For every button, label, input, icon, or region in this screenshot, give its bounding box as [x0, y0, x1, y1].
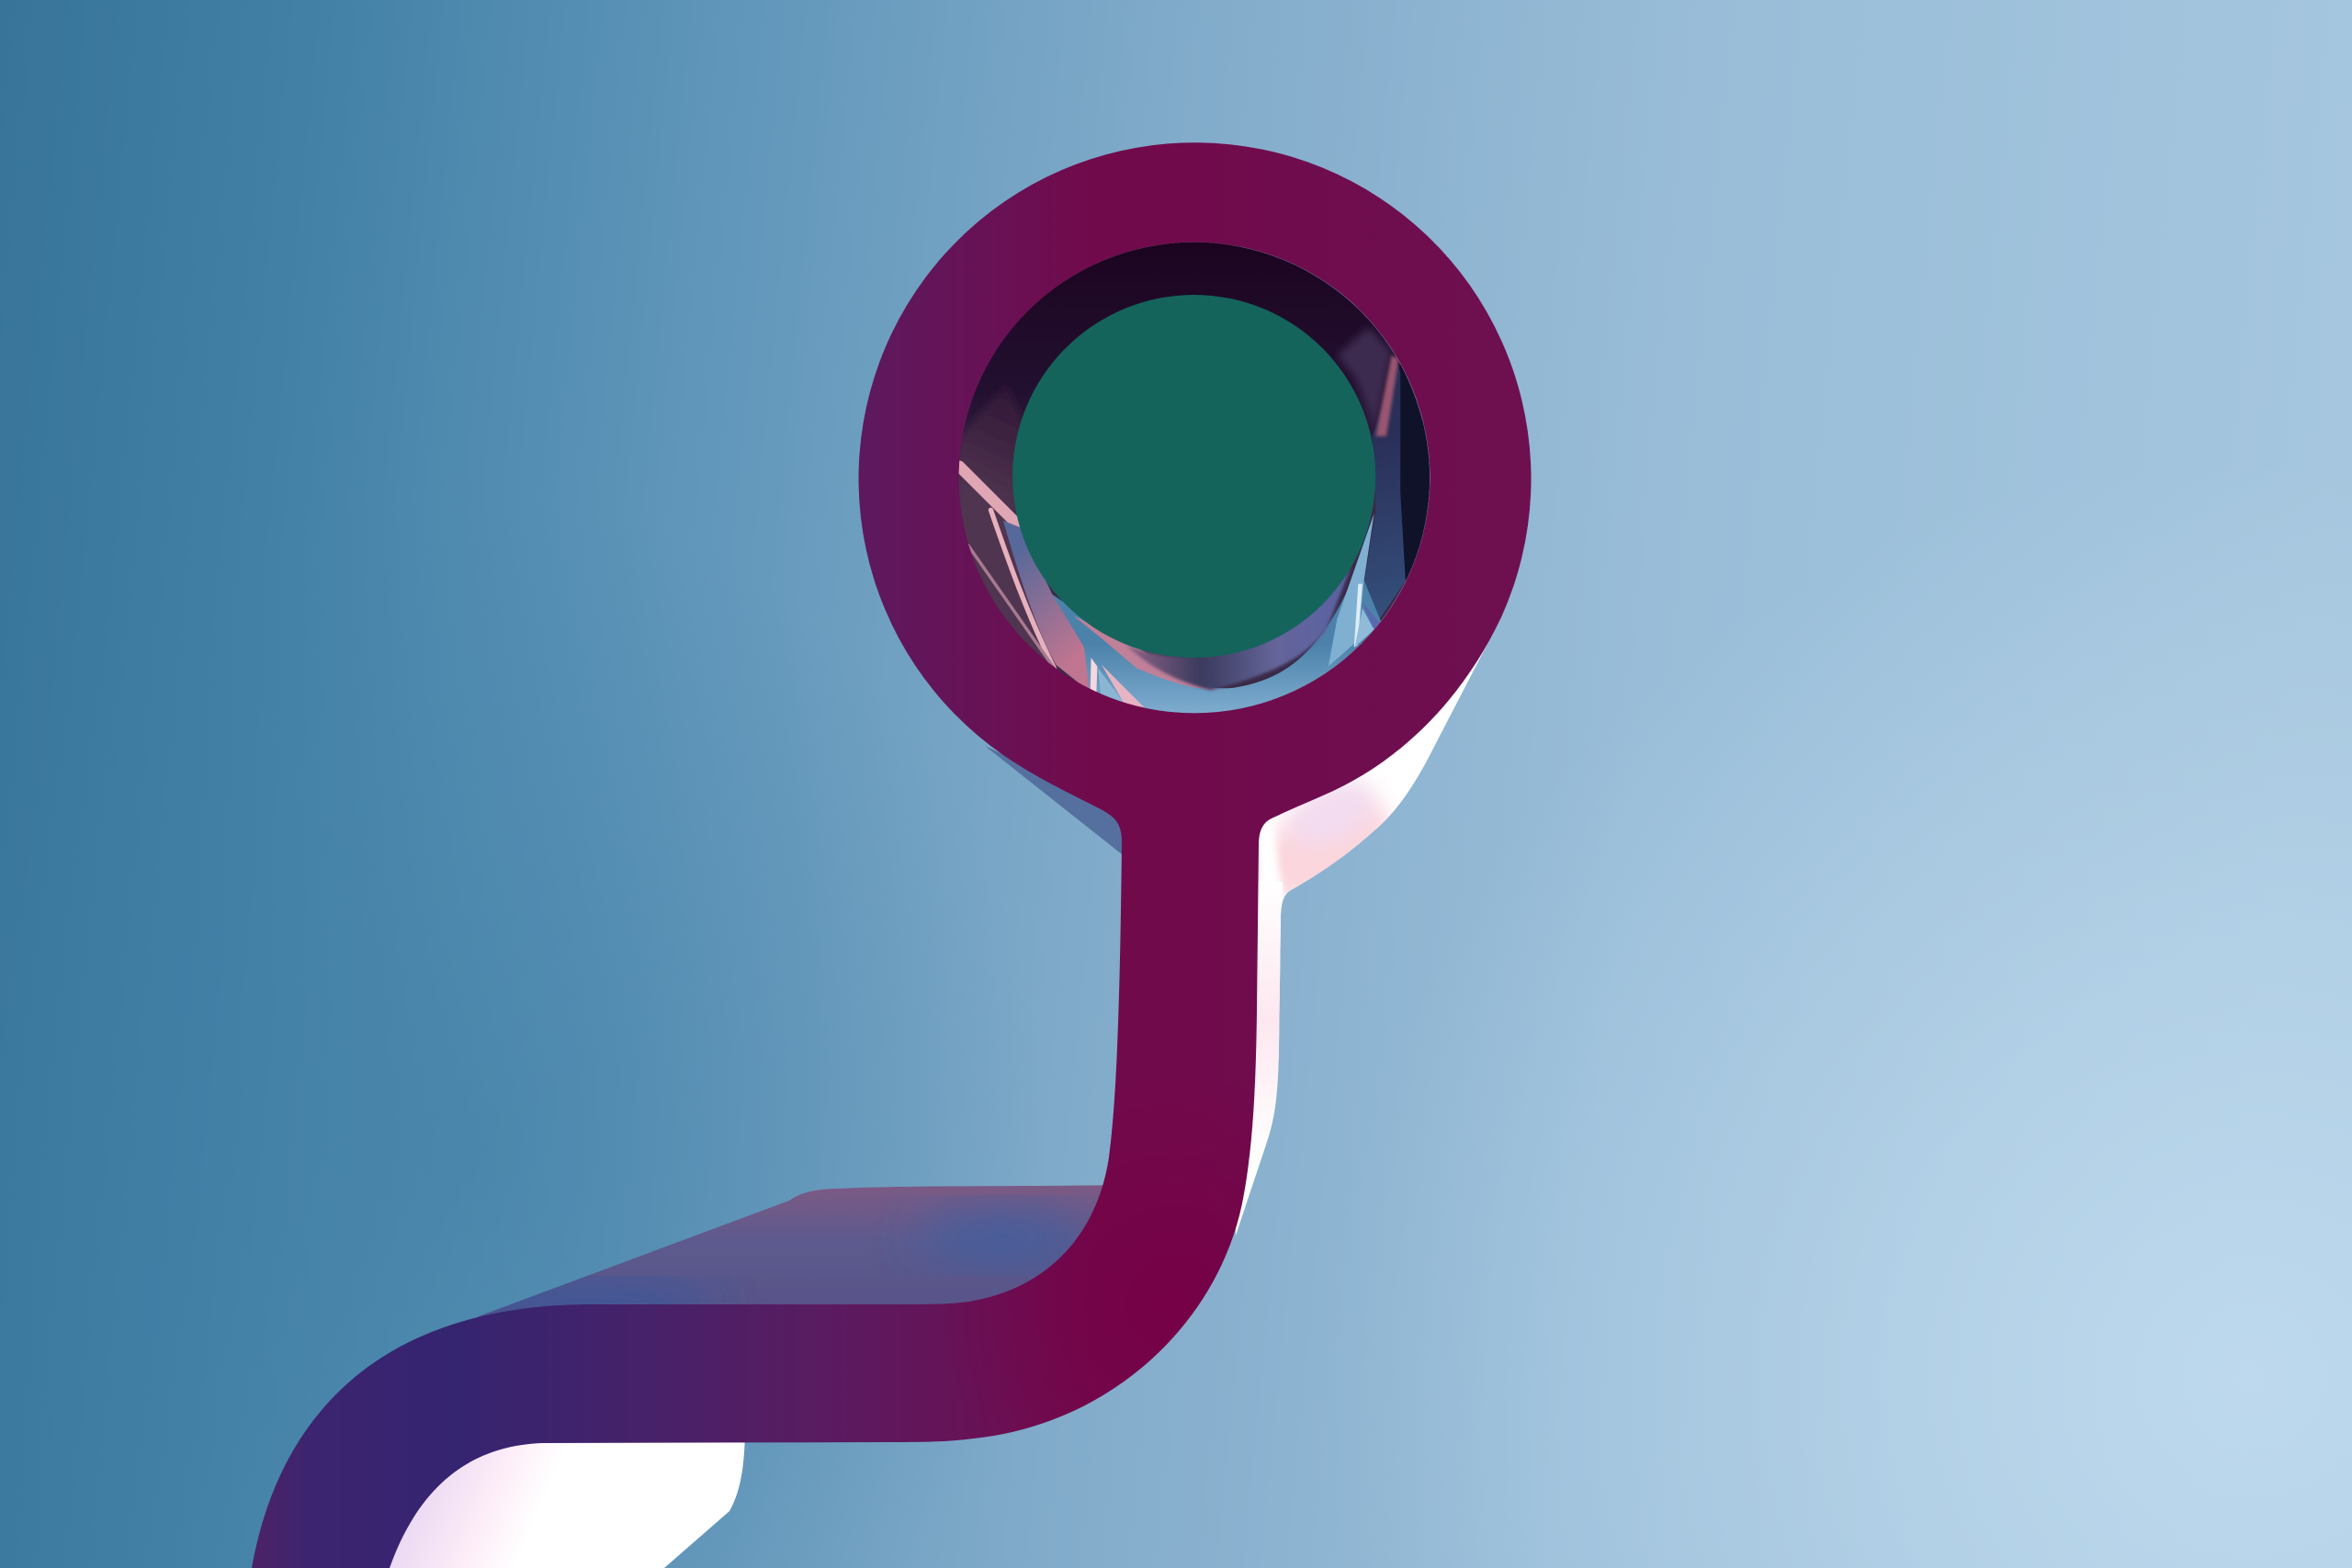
interior: right periwinkle corner [1362, 602, 1379, 629]
white inner face below lower ribbon [368, 1433, 745, 1568]
interior: right dark edge [1400, 364, 1430, 582]
shadowed wing left of stem [985, 746, 1122, 854]
hollow interior of ring [954, 236, 1436, 728]
interior: mauve blue fold [1003, 521, 1091, 693]
interior: pink band under disc [1073, 615, 1217, 690]
interior: right pale blue column [1329, 513, 1374, 667]
interior: pink lower glint [1102, 665, 1145, 707]
interior: right thin glint [1354, 584, 1363, 648]
interior: white vertical glint [1091, 658, 1097, 696]
green disc [1012, 295, 1375, 658]
interior: dark belly under disc [1126, 566, 1351, 690]
interior: light blue floor [1053, 581, 1381, 713]
interior: left mauve reflection [959, 388, 1057, 668]
back face of lower ribbon [479, 1185, 1102, 1317]
interior: pale blue wedge [1098, 669, 1123, 702]
interior: right navy panel [1364, 364, 1430, 619]
interior: right pink streak [1375, 355, 1398, 436]
interior: upper right sheen [1337, 327, 1392, 429]
ribbon: ring, stem and lower bend [252, 142, 1532, 1568]
white wing right of head and stem [1236, 617, 1501, 1235]
interior: left pink streaks [959, 466, 1054, 668]
interior: right lower blue [1355, 608, 1374, 648]
